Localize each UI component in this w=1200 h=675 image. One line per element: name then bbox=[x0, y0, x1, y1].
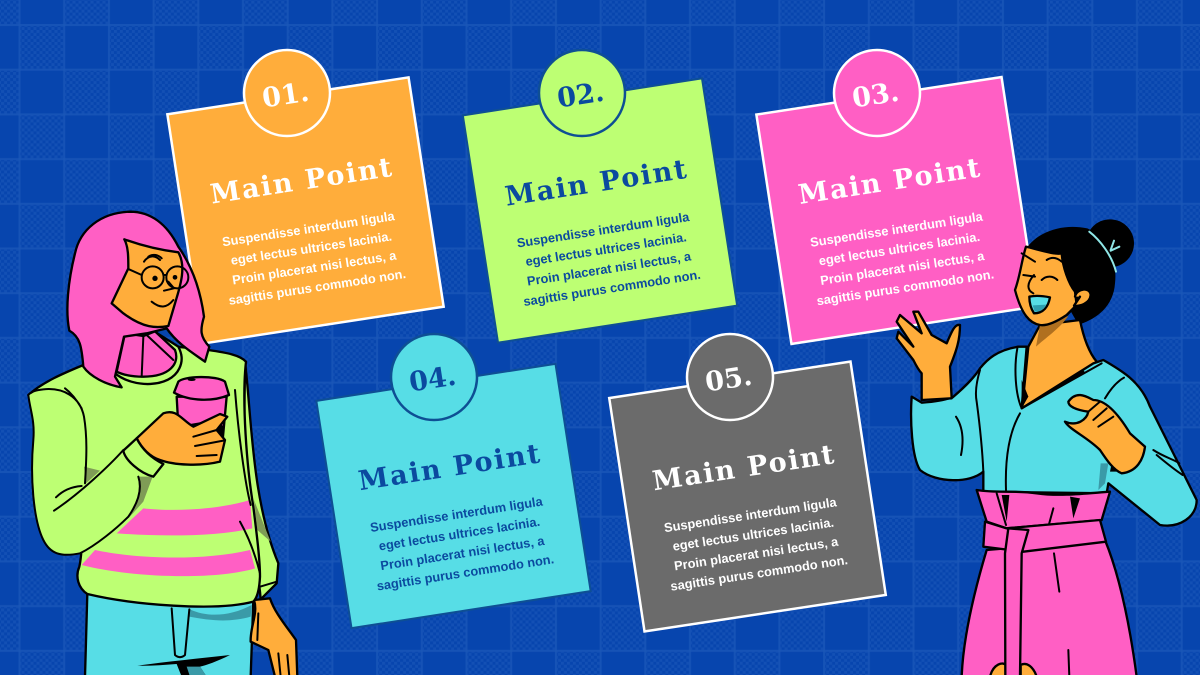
card 05 body: Suspendisse interdum ligula bbox=[663, 494, 838, 535]
card 01 body: Proin placerat nisi lectus, a bbox=[231, 247, 398, 287]
face bbox=[112, 239, 188, 327]
card 02 body: sagittis purus commodo non. bbox=[522, 267, 702, 309]
lower right hand bbox=[251, 598, 297, 675]
card 01 number badge: 01. bbox=[260, 77, 311, 114]
gesturing hand bbox=[1065, 395, 1145, 473]
card 04 body: Suspendisse interdum ligula bbox=[369, 493, 544, 535]
neck and chest bbox=[1022, 316, 1097, 413]
card 03 body: sagittis purus commodo non. bbox=[816, 266, 995, 308]
card 03 number badge bbox=[834, 50, 920, 136]
pink waist ruffle bbox=[977, 490, 1110, 528]
card 01 body: sagittis purus commodo non. bbox=[228, 266, 407, 308]
belt bbox=[983, 520, 1106, 675]
card 05 body: sagittis purus commodo non. bbox=[669, 552, 849, 594]
card 02 body: Suspendisse interdum ligula bbox=[516, 209, 691, 251]
card 05 body: Proin placerat nisi lectus, a bbox=[673, 534, 840, 573]
card 01 number badge bbox=[244, 50, 330, 136]
card 01 body: Main Point bbox=[208, 152, 394, 211]
card 05 body bbox=[609, 362, 886, 631]
card 03 body: Proin placerat nisi lectus, a bbox=[819, 248, 986, 288]
card 04 number badge: 04. bbox=[407, 361, 458, 398]
sweater stripes bbox=[82, 390, 260, 576]
face bbox=[1015, 247, 1091, 325]
pink trousers bbox=[962, 540, 1137, 675]
panel: card 05 bbox=[609, 334, 886, 631]
left arm and shoulder bbox=[28, 388, 163, 555]
card 04 body: Main Point bbox=[356, 438, 542, 497]
card 04 body: sagittis purus commodo non. bbox=[376, 551, 555, 594]
card 05 body: eget lectus ultrices lacinia. bbox=[672, 515, 835, 554]
jeans bbox=[85, 593, 253, 675]
card 04 number badge bbox=[391, 334, 477, 420]
card 01 body bbox=[167, 77, 444, 344]
card 04 body: eget lectus ultrices lacinia. bbox=[378, 514, 541, 554]
card 03 body: Main Point bbox=[796, 153, 982, 211]
card 04 body: Proin placerat nisi lectus, a bbox=[379, 533, 546, 573]
card 02 number badge bbox=[539, 50, 625, 136]
card 01 body: Suspendisse interdum ligula bbox=[221, 208, 396, 249]
card 05 body: Main Point bbox=[650, 439, 837, 497]
coffee cup bbox=[174, 377, 229, 460]
card 03 body: eget lectus ultrices lacinia. bbox=[818, 229, 981, 268]
card 05 number badge: 05. bbox=[703, 361, 754, 398]
panel: card 04 bbox=[316, 334, 591, 628]
hair and bun bbox=[1023, 219, 1134, 336]
card 05 number badge bbox=[687, 334, 773, 420]
pink hair bbox=[67, 212, 209, 387]
raised hand bbox=[897, 312, 960, 400]
panel: card 01 bbox=[167, 50, 444, 344]
robe bbox=[911, 347, 1197, 526]
hand on cup bbox=[123, 412, 227, 477]
card 02 body: eget lectus ultrices lacinia. bbox=[524, 229, 688, 269]
card 02 body: Main Point bbox=[503, 154, 689, 213]
card 04 body bbox=[316, 364, 591, 628]
card 02 body: Proin placerat nisi lectus, a bbox=[526, 248, 693, 289]
card 01 body: eget lectus ultrices lacinia. bbox=[230, 228, 393, 268]
card 03 number badge: 03. bbox=[850, 77, 901, 114]
illustration: woman with pink hair holding a coffee cup bbox=[28, 212, 297, 675]
illustration: laughing woman in a blue robe bbox=[897, 219, 1197, 675]
card 02 body bbox=[463, 78, 737, 343]
card 03 body: Suspendisse interdum ligula bbox=[809, 209, 984, 250]
right sleeve bbox=[243, 362, 278, 599]
pink shirt collar and neck bbox=[115, 310, 182, 384]
card 02 number badge: 02. bbox=[555, 77, 606, 114]
sweater torso bbox=[28, 347, 260, 607]
card 03 body bbox=[756, 77, 1037, 344]
panel: card 02 bbox=[463, 50, 737, 343]
panel: card 03 bbox=[756, 50, 1037, 344]
